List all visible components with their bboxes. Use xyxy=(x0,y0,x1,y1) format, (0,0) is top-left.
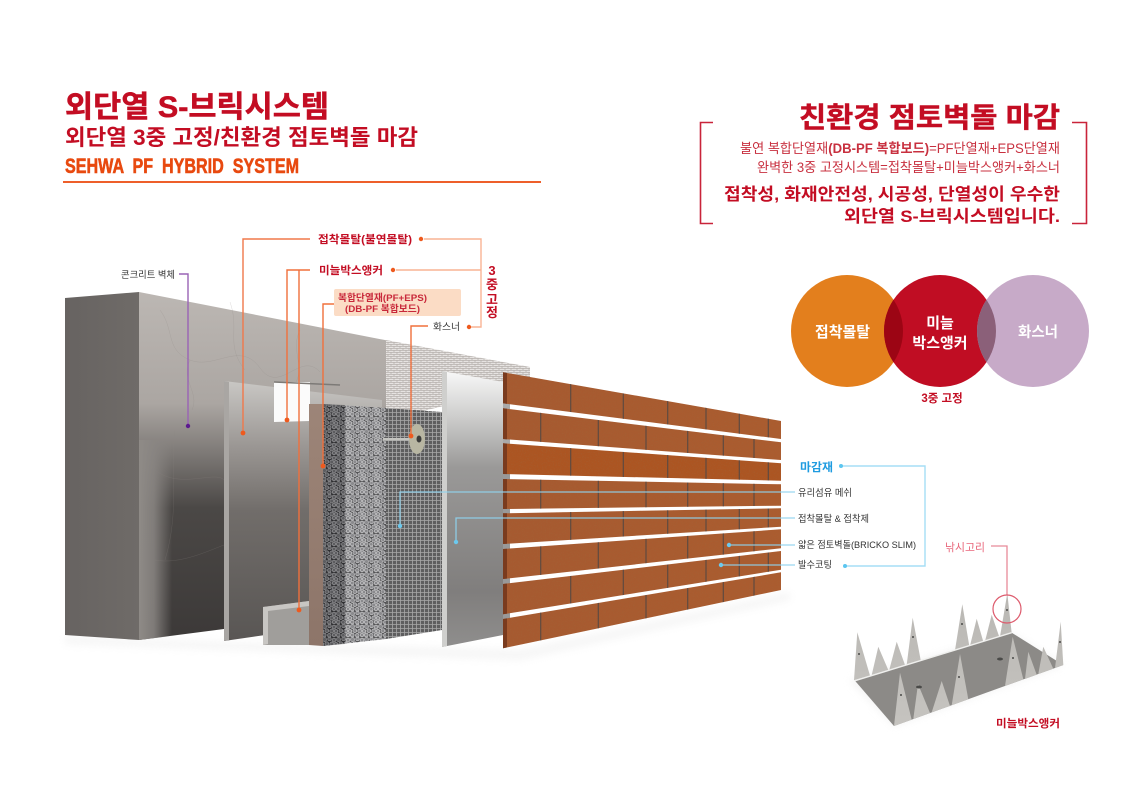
label: fishbone box anchor xyxy=(285,263,395,612)
bracket: triple fixing: 중 xyxy=(486,277,498,292)
label: adhesive mortar xyxy=(241,232,423,435)
label: composite insulation: (DB-PF 복합보드) xyxy=(345,303,420,315)
subtitle: 외단열 3중 고정/친환경 점토벽돌 마감 xyxy=(65,125,418,150)
finishing materials labels: 발수코팅 xyxy=(798,560,832,571)
concrete wall xyxy=(65,292,390,640)
label: concrete wall xyxy=(121,270,190,428)
circle: adhesive mortar xyxy=(791,275,903,387)
front teeth xyxy=(894,622,1063,726)
label: composite insulation xyxy=(321,289,461,468)
bracket: triple fixing xyxy=(396,239,498,327)
finishing materials labels xyxy=(398,460,925,571)
label: fishhook xyxy=(945,541,1021,623)
finishing plate xyxy=(442,371,503,647)
label: adhesive mortar: 접착몰탈(불연몰탈) xyxy=(318,232,412,246)
wall cross-section illustration xyxy=(65,292,790,660)
callout: eco-friendly clay brick finish: 완벽한 3중 고정시스템=접착몰탈+미늘박스앵커+화스너 xyxy=(757,160,1060,175)
label list: 유리섬유 메쉬 xyxy=(798,488,852,499)
circle: fastener xyxy=(977,275,1089,387)
heading: finish: 마감재 xyxy=(800,460,833,474)
label: fishbone box anchor: 미늘박스앵커 xyxy=(319,263,383,277)
adhesive mortar plate xyxy=(224,381,382,641)
label: concrete wall: 콘크리트 벽체 xyxy=(121,270,175,281)
anchor behind insulation xyxy=(263,382,340,645)
leader lines xyxy=(400,492,795,565)
callout: eco-friendly clay brick finish xyxy=(700,102,1086,226)
venn diagram: triple fixing xyxy=(791,275,1089,405)
back teeth xyxy=(854,593,1012,680)
callout heading: 친환경 점토벽돌 마감 xyxy=(799,102,1060,133)
label: fastener xyxy=(409,322,471,438)
venn diagram: triple fixing: 미늘 xyxy=(926,315,954,332)
venn diagram: triple fixing: 3중 고정 xyxy=(921,392,963,405)
anchor caption: 미늘박스앵커 xyxy=(996,716,1060,730)
upper glass-fibre mesh xyxy=(386,340,530,420)
fishbone anchor illustration xyxy=(850,541,1063,730)
bracket: triple fixing: 고 xyxy=(486,292,498,307)
circle: fishbone box anchor xyxy=(884,275,996,387)
clay brick wall xyxy=(503,365,781,655)
system name: SEHWA PF HYBRID SYSTEM xyxy=(65,155,299,178)
title block xyxy=(63,91,541,183)
label: fishhook: 낚시고리 xyxy=(945,541,985,554)
bracket: triple fixing: 정 xyxy=(486,305,498,320)
base plate xyxy=(855,633,1063,726)
venn diagram: triple fixing: 접착몰탈 xyxy=(815,324,870,341)
callout: eco-friendly clay brick finish: 외단열 S-브릭시스템입니다. xyxy=(844,207,1060,226)
finishing materials labels: 얇은 점토벽돌(BRICKO SLIM) xyxy=(798,539,916,551)
callout description: 불연 복합단열재(DB-PF 복합보드)=PF단열재+EPS단열재 xyxy=(740,141,1060,156)
anchor holes xyxy=(858,609,1061,696)
main title: 외단열 S-브릭시스템 xyxy=(65,91,329,124)
label: fastener: 화스너 xyxy=(433,322,460,333)
callout emphasis: 접착성, 화재안전성, 시공성, 단열성이 우수한 xyxy=(724,185,1060,204)
finishing materials labels: 접착몰탈 & 접착제 xyxy=(798,513,869,525)
composite insulation board xyxy=(309,404,442,646)
label: composite insulation: 복합단열재(PF+EPS) xyxy=(338,292,427,304)
fastener xyxy=(383,424,425,454)
bracket: triple fixing: 3 xyxy=(488,263,496,278)
venn diagram: triple fixing: 화스너 xyxy=(1018,324,1058,341)
venn diagram: triple fixing: 박스앵커 xyxy=(912,335,968,352)
